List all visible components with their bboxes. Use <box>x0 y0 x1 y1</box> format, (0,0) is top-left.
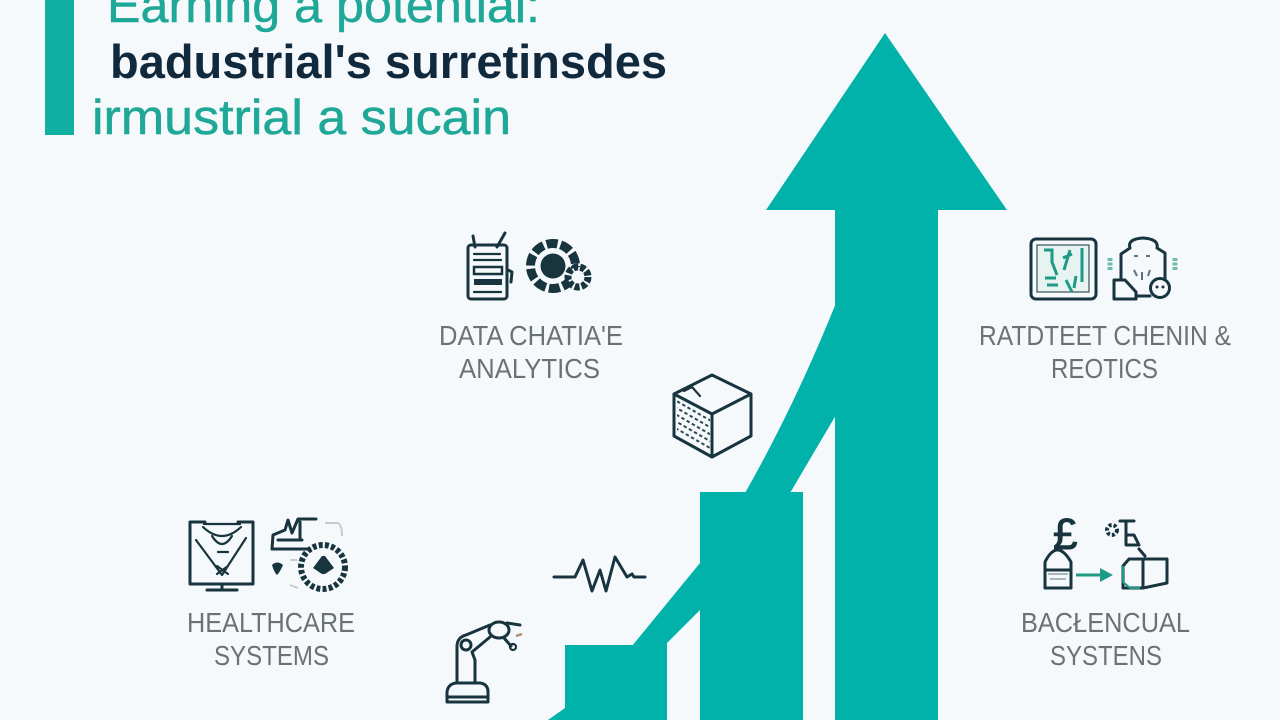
label: backend systems: BACŁENCUAL <box>1021 607 1190 638</box>
label: healthcare systems: SYSTEMS <box>214 640 329 671</box>
title <box>92 0 667 145</box>
growth chart: bars with rising arrow <box>548 33 1007 720</box>
icon: healthcare monitor and gear <box>190 519 345 590</box>
label: healthcare systems <box>187 607 355 671</box>
bar 3 with arrow head <box>766 33 1007 720</box>
label: patient chain and robotics <box>979 320 1231 384</box>
label: data analytics: DATA CHATIA'E <box>439 320 623 351</box>
label: backend systems <box>1021 607 1190 671</box>
clipboard <box>468 233 512 299</box>
icon: robot arm <box>447 622 522 702</box>
rising swoosh <box>548 303 836 720</box>
bar 2 <box>700 492 803 720</box>
icon: pulse line <box>554 557 645 591</box>
icon: bottle, arrow and box <box>1045 510 1167 588</box>
bar 1 <box>565 645 667 720</box>
icon: data analytics <box>468 233 588 299</box>
label: data analytics <box>439 320 623 384</box>
icon: tablet and robot <box>1031 238 1175 299</box>
title: badustrial's surretinsdes <box>110 35 667 88</box>
label: healthcare systems: HEALTHCARE <box>187 607 355 638</box>
label: patient chain and robotics: REOTICS <box>1051 353 1158 384</box>
title accent bar <box>45 0 74 135</box>
label: backend systems: SYSTENS <box>1050 640 1162 671</box>
gears <box>530 244 588 288</box>
label: data analytics: ANALYTICS <box>459 353 600 384</box>
label: patient chain and robotics: RATDTEET CHENIN & <box>979 320 1231 351</box>
icon: cube <box>674 375 751 457</box>
icon: bottle, arrow and box: £ <box>1053 510 1077 559</box>
title: irmustrial a sucain <box>92 91 511 145</box>
